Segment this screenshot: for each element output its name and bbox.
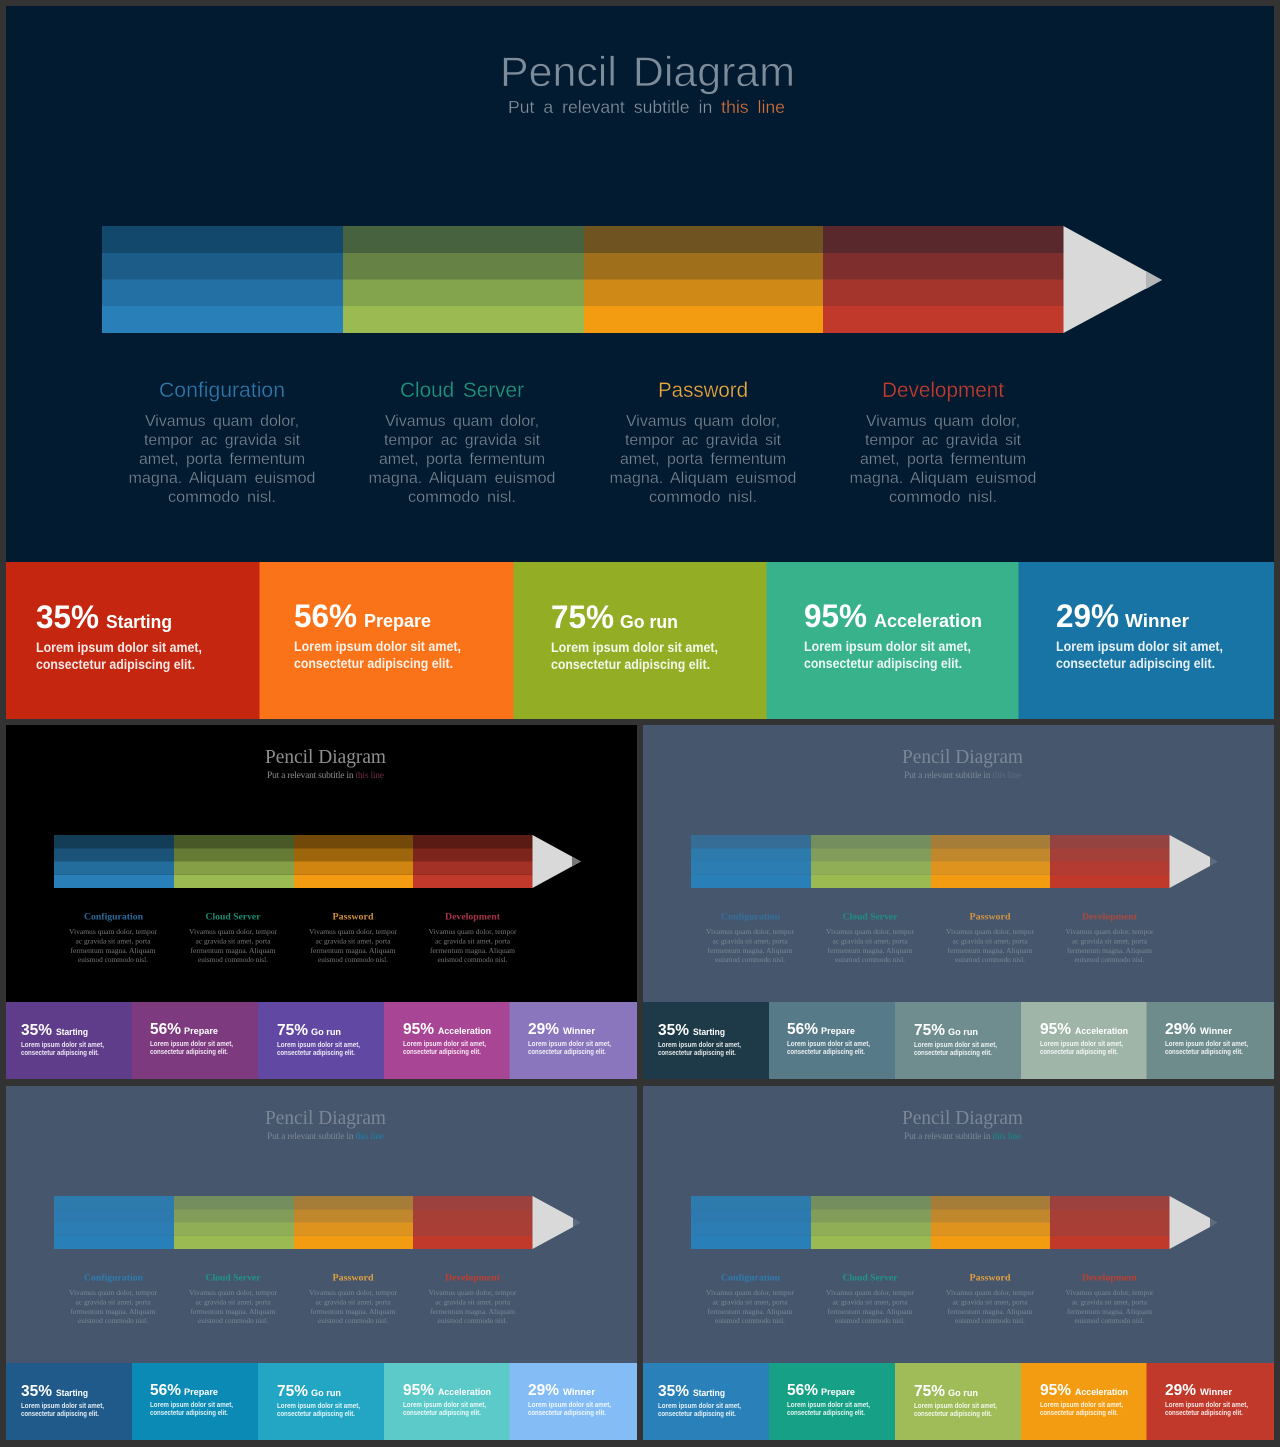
column labels: ac gravida sit amet, porta xyxy=(952,1298,1028,1306)
stat strip: 75% xyxy=(277,1022,308,1039)
column: Password: tempor ac gravida sit xyxy=(625,432,782,449)
stat strip: Prepare xyxy=(184,1026,218,1037)
stat strip: Lorem ipsum dolor sit amet, xyxy=(528,1039,611,1048)
column labels: Vivamus quam dolor, tempor xyxy=(189,1288,277,1297)
stat: 35% Starting: consectetur adipiscing elit. xyxy=(36,656,195,672)
stat strip: Winner xyxy=(1200,1387,1232,1398)
stat strip: 56% xyxy=(150,1382,181,1399)
stat strip: consectetur adipiscing elit. xyxy=(1165,1047,1243,1056)
column labels: Vivamus quam dolor, tempor xyxy=(826,927,914,936)
column labels: euismod commodo nisl. xyxy=(438,955,508,964)
subtitle: Put a relevant subtitle in this line xyxy=(904,771,1021,781)
column labels: Vivamus quam dolor, tempor xyxy=(946,927,1034,936)
stat strip: 29% xyxy=(1165,1021,1196,1038)
column labels: euismod commodo nisl. xyxy=(438,1316,508,1325)
column labels: fermentum magna. Aliquam xyxy=(310,946,396,955)
column labels: Vivamus quam dolor, tempor xyxy=(189,927,277,936)
column labels: Vivamus quam dolor, tempor xyxy=(69,1288,157,1297)
stat strip xyxy=(6,1002,637,1079)
stat strip: consectetur adipiscing elit. xyxy=(150,1047,228,1056)
stat strip: Acceleration xyxy=(1075,1387,1128,1398)
column labels: fermentum magna. Aliquam xyxy=(708,1307,793,1316)
stat strip: consectetur adipiscing elit. xyxy=(528,1047,606,1056)
column labels: Development xyxy=(1082,1274,1138,1284)
column labels: euismod commodo nisl. xyxy=(198,955,268,964)
pencil diagram xyxy=(54,835,581,888)
stat strip: consectetur adipiscing elit. xyxy=(21,1409,99,1418)
column labels: Configuration xyxy=(84,912,144,922)
stat strip: 95% xyxy=(403,1021,434,1038)
stat strip: Lorem ipsum dolor sit amet, xyxy=(1040,1039,1123,1048)
column labels: Vivamus quam dolor, tempor xyxy=(69,927,157,936)
column: Development: Vivamus quam dolor, xyxy=(866,413,1020,430)
stat strip: 35% xyxy=(658,1383,689,1400)
column labels: euismod commodo nisl. xyxy=(198,1316,268,1325)
column labels: Configuration xyxy=(721,912,781,922)
stat strip: Lorem ipsum dolor sit amet, xyxy=(914,1401,997,1410)
stat: 56% Prepare: Prepare xyxy=(364,611,431,631)
stat strip: Lorem ipsum dolor sit amet, xyxy=(658,1040,741,1049)
column labels: euismod commodo nisl. xyxy=(1074,1316,1145,1325)
column labels: fermentum magna. Aliquam xyxy=(70,946,156,955)
stat strip: 56% xyxy=(787,1382,818,1399)
stat: 35% Starting: Lorem ipsum dolor sit amet, xyxy=(36,639,202,655)
column: Configuration: amet, porta fermentum xyxy=(139,451,305,468)
column labels: ac gravida sit amet, porta xyxy=(832,936,908,946)
panel: black variant xyxy=(6,725,637,1079)
stat: 29% Winner: 29% xyxy=(1056,598,1119,634)
column labels: euismod commodo nisl. xyxy=(715,955,785,964)
column labels: ac gravida sit amet, porta xyxy=(196,936,271,946)
stat strip: Acceleration xyxy=(1075,1026,1128,1037)
column labels: euismod commodo nisl. xyxy=(78,1316,148,1325)
panel: slate variant with multicolour strip xyxy=(643,1086,1274,1440)
stat: 75% Go run: Go run xyxy=(620,612,678,632)
column labels: fermentum magna. Aliquam xyxy=(1067,946,1152,955)
stat: 29% Winner: Lorem ipsum dolor sit amet, xyxy=(1056,638,1223,654)
column labels: Cloud Server xyxy=(842,912,898,922)
stat: 29% Winner: Winner xyxy=(1125,611,1189,631)
stat strip: Lorem ipsum dolor sit amet, xyxy=(1165,1400,1248,1409)
stat: 56% Prepare: Lorem ipsum dolor sit amet, xyxy=(294,638,461,654)
stat strip: Lorem ipsum dolor sit amet, xyxy=(403,1400,486,1409)
column: Password: commodo nisl. xyxy=(649,489,757,506)
stat strip: Lorem ipsum dolor sit amet, xyxy=(21,1040,104,1049)
column labels: Vivamus quam dolor, tempor xyxy=(428,1288,517,1297)
subtitle: Put a relevant subtitle in this line xyxy=(904,1132,1021,1142)
column: Cloud Server xyxy=(368,379,556,506)
panel: slate variant with muted teal strip xyxy=(643,725,1274,1079)
stat strip: Starting xyxy=(693,1388,725,1399)
stat strip: consectetur adipiscing elit. xyxy=(277,1409,355,1418)
title: Pencil Diagram xyxy=(500,48,795,95)
column labels: Cloud Server xyxy=(842,1274,898,1284)
stat strip: Lorem ipsum dolor sit amet, xyxy=(528,1400,611,1409)
column labels: ac gravida sit amet, porta xyxy=(712,936,788,946)
stat: 56% Prepare: 56% xyxy=(294,598,357,634)
stat strip: Go run xyxy=(948,1027,978,1038)
stat strip: consectetur adipiscing elit. xyxy=(914,1048,992,1057)
stat: 56% Prepare: consectetur adipiscing elit. xyxy=(294,655,453,671)
column labels: euismod commodo nisl. xyxy=(715,1316,785,1325)
stat: 29% Winner xyxy=(1018,562,1274,719)
stat strip: Lorem ipsum dolor sit amet, xyxy=(21,1401,104,1410)
stat: 75% Go run xyxy=(514,562,766,719)
stat strip: 35% xyxy=(21,1022,52,1039)
column: Password: Password xyxy=(658,379,748,402)
column labels: ac gravida sit amet, porta xyxy=(712,1298,788,1306)
column labels: Vivamus quam dolor, tempor xyxy=(826,1288,914,1297)
column: Configuration: commodo nisl. xyxy=(168,489,276,506)
column labels: Cloud Server xyxy=(206,1274,261,1284)
column labels: euismod commodo nisl. xyxy=(955,955,1025,964)
stat strip: Lorem ipsum dolor sit amet, xyxy=(277,1040,360,1049)
stat strip: consectetur adipiscing elit. xyxy=(403,1408,481,1417)
pencil diagram xyxy=(691,835,1218,888)
column: Configuration: Configuration xyxy=(159,379,285,402)
stat strip: Lorem ipsum dolor sit amet, xyxy=(277,1401,360,1410)
column: Configuration: tempor ac gravida sit xyxy=(144,432,301,449)
title: Pencil Diagram xyxy=(902,746,1023,768)
column labels: Development xyxy=(445,1274,501,1284)
stat strip: Lorem ipsum dolor sit amet, xyxy=(658,1401,741,1410)
stat strip: Go run xyxy=(311,1388,341,1399)
column: Password: Vivamus quam dolor, xyxy=(626,413,780,430)
stat strip: 29% xyxy=(528,1021,559,1038)
stat strip: consectetur adipiscing elit. xyxy=(150,1408,228,1417)
column labels: Vivamus quam dolor, tempor xyxy=(309,927,397,936)
stat strip: Prepare xyxy=(821,1026,855,1037)
column labels: Password xyxy=(970,912,1011,922)
column labels: ac gravida sit amet, porta xyxy=(76,936,151,946)
column labels: ac gravida sit amet, porta xyxy=(316,1298,391,1306)
column labels: euismod commodo nisl. xyxy=(955,1316,1025,1325)
stat strip: 29% xyxy=(528,1382,559,1399)
subtitle: Put a relevant subtitle in this line xyxy=(267,1132,384,1142)
stat strip: 95% xyxy=(1040,1021,1071,1038)
column labels xyxy=(69,1274,517,1325)
column labels: euismod commodo nisl. xyxy=(835,955,905,964)
stat strip xyxy=(643,1363,1274,1440)
column: Configuration xyxy=(128,379,316,506)
column labels: euismod commodo nisl. xyxy=(78,955,148,964)
stat strip: 35% xyxy=(658,1022,689,1039)
stat: 95% Acceleration: Lorem ipsum dolor sit amet, xyxy=(804,638,971,654)
column: Cloud Server: Vivamus quam dolor, xyxy=(385,413,539,430)
column labels: euismod commodo nisl. xyxy=(1074,955,1145,964)
stat strip: Starting xyxy=(56,1027,88,1038)
title: Pencil Diagram xyxy=(902,1107,1023,1129)
stat: 95% Acceleration: consectetur adipiscing elit. xyxy=(804,655,962,671)
column labels xyxy=(69,912,517,964)
column labels: ac gravida sit amet, porta xyxy=(196,1298,271,1306)
column: Development: Development xyxy=(882,379,1004,402)
column labels: ac gravida sit amet, porta xyxy=(952,936,1028,946)
stat strip: Lorem ipsum dolor sit amet, xyxy=(787,1039,870,1048)
column labels: Configuration xyxy=(84,1274,144,1284)
column labels: Vivamus quam dolor, tempor xyxy=(1066,1288,1154,1297)
column labels: Vivamus quam dolor, tempor xyxy=(309,1288,397,1297)
panel: main slide xyxy=(6,6,1274,719)
stat strip: consectetur adipiscing elit. xyxy=(1040,1408,1118,1417)
stat strip: Winner xyxy=(563,1387,595,1398)
stat strip: consectetur adipiscing elit. xyxy=(787,1047,865,1056)
column labels: euismod commodo nisl. xyxy=(318,955,388,964)
column labels: ac gravida sit amet, porta xyxy=(316,936,391,946)
stat: 75% Go run: consectetur adipiscing elit. xyxy=(551,656,710,672)
column: Password: amet, porta fermentum xyxy=(620,451,786,468)
column: Development: magna. Aliquam euismod xyxy=(850,470,1036,487)
stat strip xyxy=(643,1002,1274,1079)
column labels: fermentum magna. Aliquam xyxy=(948,946,1033,955)
stat strip: consectetur adipiscing elit. xyxy=(914,1409,992,1418)
subtitle: Put a relevant subtitle in this line xyxy=(508,97,785,117)
stat: 29% Winner: consectetur adipiscing elit. xyxy=(1056,655,1215,671)
column labels: Password xyxy=(332,1274,374,1284)
column: Password: magna. Aliquam euismod xyxy=(610,470,796,487)
column: Configuration: magna. Aliquam euismod xyxy=(128,470,316,487)
stat strip: consectetur adipiscing elit. xyxy=(21,1048,99,1057)
stat: 56% Prepare xyxy=(260,562,514,719)
column labels: Vivamus quam dolor, tempor xyxy=(1066,927,1154,936)
column labels: fermentum magna. Aliquam xyxy=(1067,1307,1152,1316)
stat: 35% Starting: Starting xyxy=(106,612,172,632)
stat strip: Prepare xyxy=(184,1387,218,1398)
stat: 75% Go run: 75% xyxy=(551,599,614,635)
stat strip: 56% xyxy=(150,1021,181,1038)
stat strip: Go run xyxy=(311,1027,341,1038)
column labels: Vivamus quam dolor, tempor xyxy=(706,1288,794,1297)
column labels: Configuration xyxy=(721,1274,781,1284)
column labels: fermentum magna. Aliquam xyxy=(190,1307,276,1316)
column labels: ac gravida sit amet, porta xyxy=(1072,936,1148,946)
column labels: fermentum magna. Aliquam xyxy=(828,946,913,955)
column: Cloud Server: magna. Aliquam euismod xyxy=(368,470,556,487)
stat strip: Lorem ipsum dolor sit amet, xyxy=(914,1040,997,1049)
stat strip: 95% xyxy=(403,1382,434,1399)
stat: 35% Starting xyxy=(6,562,260,719)
pencil segment: green xyxy=(343,226,584,333)
stat strip: Winner xyxy=(1200,1026,1232,1037)
column: Configuration: Vivamus quam dolor, xyxy=(145,413,299,430)
stat strip: consectetur adipiscing elit. xyxy=(658,1048,736,1057)
stat strip: Winner xyxy=(563,1026,595,1037)
column: Development: amet, porta fermentum xyxy=(860,451,1026,468)
pencil segment: orange xyxy=(584,226,823,333)
stat strip: consectetur adipiscing elit. xyxy=(403,1047,481,1056)
stat strip: 29% xyxy=(1165,1382,1196,1399)
column labels: fermentum magna. Aliquam xyxy=(430,1307,515,1316)
stat strip: Starting xyxy=(56,1388,88,1399)
column: Password xyxy=(610,379,796,506)
pencil diagram xyxy=(102,226,1162,333)
stat strip: consectetur adipiscing elit. xyxy=(1040,1047,1118,1056)
title: Pencil Diagram xyxy=(265,746,386,768)
stat strip: Starting xyxy=(693,1027,725,1038)
pencil diagram xyxy=(691,1196,1218,1249)
column labels: Vivamus quam dolor, tempor xyxy=(428,927,517,936)
stat strip: Go run xyxy=(948,1388,978,1399)
stat strip: Lorem ipsum dolor sit amet, xyxy=(150,1039,233,1048)
column labels: Vivamus quam dolor, tempor xyxy=(706,927,794,936)
stat strip: consectetur adipiscing elit. xyxy=(787,1408,865,1417)
pencil segment: blue xyxy=(102,226,343,333)
stat strip: 95% xyxy=(1040,1382,1071,1399)
pencil diagram xyxy=(54,1196,581,1249)
column labels: fermentum magna. Aliquam xyxy=(708,946,793,955)
column: Development: tempor ac gravida sit xyxy=(865,432,1022,449)
column labels: fermentum magna. Aliquam xyxy=(430,946,515,955)
column: Cloud Server: amet, porta fermentum xyxy=(379,451,545,468)
stat strip: consectetur adipiscing elit. xyxy=(277,1048,355,1057)
stat: 95% Acceleration xyxy=(766,562,1018,719)
column labels: fermentum magna. Aliquam xyxy=(828,1307,913,1316)
column labels: Password xyxy=(332,912,374,922)
pencil segment: red xyxy=(823,226,1064,333)
column labels: ac gravida sit amet, porta xyxy=(1072,1298,1148,1306)
column labels: Vivamus quam dolor, tempor xyxy=(946,1288,1034,1297)
column labels: fermentum magna. Aliquam xyxy=(948,1307,1033,1316)
stat strip: Lorem ipsum dolor sit amet, xyxy=(1040,1400,1123,1409)
stat strip: 56% xyxy=(787,1021,818,1038)
stat strip: 35% xyxy=(21,1383,52,1400)
column labels: fermentum magna. Aliquam xyxy=(190,946,276,955)
column labels: fermentum magna. Aliquam xyxy=(310,1307,396,1316)
title: Pencil Diagram xyxy=(265,1107,386,1129)
stat strip: 75% xyxy=(914,1022,945,1039)
column: Cloud Server: commodo nisl. xyxy=(408,489,516,506)
stat: 95% Acceleration: 95% xyxy=(804,598,867,634)
stat strip: 75% xyxy=(914,1383,945,1400)
panel: slate variant with blue strip xyxy=(6,1086,637,1440)
column labels: ac gravida sit amet, porta xyxy=(76,1298,151,1306)
pencil tip xyxy=(1064,226,1162,333)
stat strip: consectetur adipiscing elit. xyxy=(528,1408,606,1417)
stat: 35% Starting: 35% xyxy=(36,599,99,635)
stat strip: 75% xyxy=(277,1383,308,1400)
stat: 95% Acceleration: Acceleration xyxy=(874,611,982,631)
column labels: ac gravida sit amet, porta xyxy=(435,1298,511,1306)
stat: 75% Go run: Lorem ipsum dolor sit amet, xyxy=(551,639,718,655)
column labels: euismod commodo nisl. xyxy=(835,1316,905,1325)
column labels: euismod commodo nisl. xyxy=(318,1316,388,1325)
column: Development: commodo nisl. xyxy=(889,489,997,506)
stat strip: Acceleration xyxy=(438,1026,491,1037)
column labels: Development xyxy=(445,912,501,922)
column labels: Cloud Server xyxy=(206,912,261,922)
column labels: Password xyxy=(970,1274,1011,1284)
stat strip xyxy=(6,1363,637,1440)
subtitle: Put a relevant subtitle in this line xyxy=(267,771,384,781)
stat strip: Lorem ipsum dolor sit amet, xyxy=(1165,1039,1248,1048)
stat strip: Acceleration xyxy=(438,1387,491,1398)
stat strip: consectetur adipiscing elit. xyxy=(1165,1408,1243,1417)
column: Cloud Server: tempor ac gravida sit xyxy=(384,432,541,449)
column: Development xyxy=(850,379,1036,506)
column labels xyxy=(706,912,1154,964)
stat strip: Lorem ipsum dolor sit amet, xyxy=(403,1039,486,1048)
stat strip: Lorem ipsum dolor sit amet, xyxy=(787,1400,870,1409)
column labels: ac gravida sit amet, porta xyxy=(435,936,511,946)
column labels: Development xyxy=(1082,912,1138,922)
column labels: ac gravida sit amet, porta xyxy=(832,1298,908,1306)
stat strip: Prepare xyxy=(821,1387,855,1398)
stat strip: consectetur adipiscing elit. xyxy=(658,1409,736,1418)
column: Cloud Server: Cloud Server xyxy=(400,379,524,402)
column labels: fermentum magna. Aliquam xyxy=(70,1307,156,1316)
stat strip: Lorem ipsum dolor sit amet, xyxy=(150,1400,233,1409)
column labels xyxy=(706,1274,1154,1325)
